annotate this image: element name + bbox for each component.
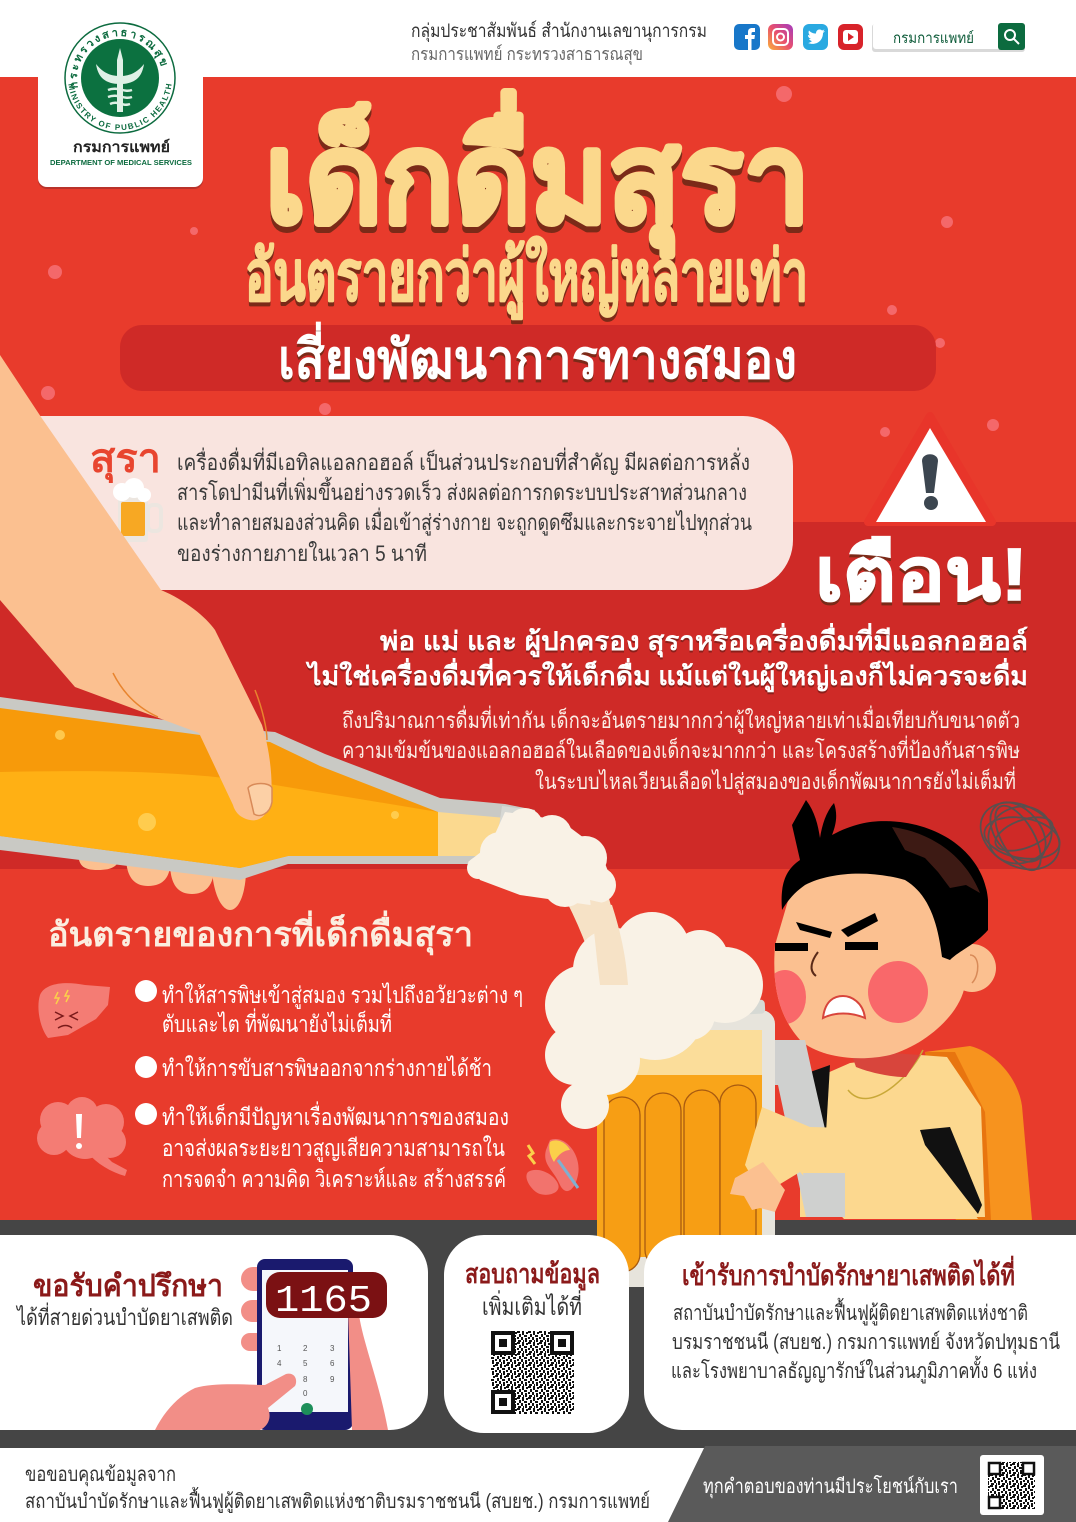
logo emblem: กระทรวงสาธารณสุข bbox=[70, 30, 167, 88]
illustration: beer bottle bbox=[0, 697, 535, 880]
icon: small beer mug bbox=[113, 478, 161, 542]
footer: feedback strip bbox=[668, 1446, 1076, 1522]
icon: phone with hands: 3 bbox=[330, 1344, 335, 1353]
icon: phone with hands: 5 bbox=[303, 1359, 308, 1368]
icon: phone with hands: 2 bbox=[303, 1344, 308, 1353]
icon: liver bbox=[38, 983, 110, 1038]
panel: inquiry QR card: สอบถามข้อมูล bbox=[465, 1259, 600, 1291]
header: department name: กรมการแพทย์ กระทรวงสาธารณสุข bbox=[411, 44, 643, 65]
logo card bbox=[38, 22, 203, 189]
icon: phone with hands: 8 bbox=[303, 1375, 308, 1384]
hotline number badge: 1165 bbox=[275, 1280, 372, 1323]
icon: youtube bbox=[838, 24, 863, 50]
footer: feedback strip: ทุกคำตอบของท่านมีประโยชน์กับเรา bbox=[703, 1475, 958, 1499]
banner: brain development risk bbox=[120, 321, 936, 391]
illustration: boy backpack bbox=[925, 1046, 1032, 1220]
subtitle: อันตรายกว่าผู้ใหญ่หลายเท่า bbox=[245, 235, 808, 320]
header: department name: กลุ่มประชาสัมพันธ์ สำนักงานเลขานุการกรม bbox=[411, 20, 707, 43]
footer: credits: ขอขอบคุณข้อมูลจาก bbox=[25, 1464, 176, 1487]
header: department name bbox=[411, 20, 707, 65]
panel: what is alcohol: ของร่างกายภายในเวลา 5 นาที bbox=[177, 541, 427, 566]
icon: dizzy scribble bbox=[969, 789, 1071, 883]
illustration: foam pouring from bottle bbox=[467, 808, 626, 985]
warning message to parents bbox=[305, 622, 1028, 693]
icon: warning triangle bbox=[868, 416, 992, 522]
illustration: fingers under bottle bbox=[78, 850, 246, 910]
list: dangers: ทำให้เด็กมีปัญหาเรื่องพัฒนาการของสมอง bbox=[162, 1101, 509, 1130]
logo emblem: MINISTRY OF PUBLIC HEALTH bbox=[68, 84, 172, 130]
icon: kidney bbox=[526, 1139, 579, 1195]
icon: brain bbox=[37, 1097, 127, 1176]
list: dangers: ทำให้การขับสารพิษออกจากร่างกายได้ช้า bbox=[162, 1055, 492, 1081]
panel: what is alcohol bbox=[0, 416, 793, 590]
icon: facebook bbox=[734, 24, 760, 50]
banner: brain development risk: เสี่ยงพัฒนาการทางสมอง bbox=[278, 321, 797, 390]
search box: กรมการแพทย์ bbox=[893, 30, 974, 47]
icon: phone with hands: 9 bbox=[330, 1375, 335, 1384]
warning explanation text bbox=[342, 705, 1020, 795]
logo card: กรมการแพทย์ bbox=[73, 138, 170, 156]
panel: what is alcohol: เครื่องดื่มที่มีเอทิลแอลกอฮอล์ เป็นส่วนประกอบที่สำคัญ มีผลต่อการหลั่ง bbox=[177, 447, 750, 475]
illustration: boy shirt bbox=[796, 1050, 985, 1217]
search box bbox=[872, 23, 1025, 52]
cheeks bbox=[764, 961, 928, 1024]
list: dangers bbox=[135, 980, 523, 1192]
icon: phone with hands bbox=[155, 1259, 388, 1430]
warning message to parents: ไม่ใช่เครื่องดื่มที่ควรให้เด็กดื่ม แม้แต่ในผู้ใหญ่เองก็ไม่ควรจะดื่ม bbox=[305, 657, 1028, 693]
logo card: DEPARTMENT OF MEDICAL SERVICES bbox=[50, 158, 192, 167]
QR code small bbox=[980, 1455, 1044, 1515]
mouth bbox=[823, 996, 865, 1018]
panel: treatment centres card bbox=[644, 1235, 1076, 1430]
hotline number badge bbox=[266, 1272, 387, 1323]
illustration: beer mug bbox=[597, 999, 845, 1287]
panel: what is alcohol: สารโดปามีนที่เพิ่มขึ้นอย่างรวดเร็ว ส่งผลต่อการกดระบบประสาทส่วนกลาง bbox=[177, 477, 747, 505]
panel: what is alcohol: สุรา bbox=[90, 437, 161, 484]
panel: what is alcohol: และทำลายสมองส่วนคิด เมื่อเข้าสู่ร่างกาย จะถูกดูดซึมและกระจายไปทุกส่วน bbox=[177, 507, 752, 536]
list: dangers: ตับและไต ที่พัฒนายังไม่เต็มที่ bbox=[162, 1008, 392, 1037]
warning message to parents: พ่อ แม่ และ ผู้ปกครอง สุราหรือเครื่องดื่มที่มีแอลกอฮอล์ bbox=[380, 622, 1028, 658]
panel: hotline card: ได้ที่สายด่วนบำบัดยาเสพติด bbox=[15, 1302, 233, 1330]
logo emblem bbox=[64, 22, 176, 134]
hair bbox=[782, 800, 988, 960]
illustration: boy sleeve and hand bbox=[730, 1107, 982, 1219]
footer: credits bbox=[0, 1448, 1076, 1522]
icon: phone with hands: 1 bbox=[277, 1344, 282, 1353]
panel: hotline card: ขอรับคำปรึกษา bbox=[33, 1270, 223, 1303]
list: dangers: อาจส่งผลระยะยาวสูญเสียความสามารถใน bbox=[162, 1135, 505, 1162]
icon: twitter bbox=[803, 24, 828, 50]
illustration: mug foam bbox=[545, 900, 763, 1129]
panel: inquiry QR card: เพิ่มเติมได้ที่ bbox=[482, 1290, 582, 1321]
section heading: dangers: อันตรายของการที่เด็กดื่มสุรา bbox=[48, 910, 473, 956]
list: dangers: ทำให้สารพิษเข้าสู่สมอง รวมไปถึงอวัยวะต่าง ๆ bbox=[162, 982, 523, 1009]
icon: phone with hands: 6 bbox=[330, 1359, 335, 1368]
list: dangers: การจดจำ ความคิด วิเคราะห์และ สร้างสรรค์ bbox=[162, 1166, 506, 1192]
warning heading: เตือน! bbox=[815, 533, 1028, 616]
illustration: arm and hand holding bottle bbox=[0, 355, 272, 820]
title: เด็กดื่มสุรา bbox=[265, 90, 810, 257]
eyes and brows bbox=[775, 943, 808, 951]
panel: hotline card bbox=[0, 1235, 428, 1430]
footer: credits: สถาบันบำบัดรักษาและฟื้นฟูผู้ติดยาเสพติดแห่งชาติบรมราชชนนี (สบยช.) กรมการแพทย์ bbox=[25, 1487, 650, 1514]
icon: instagram bbox=[768, 24, 793, 50]
QR code bbox=[491, 1331, 574, 1414]
illustration: boy head bbox=[764, 800, 996, 1058]
icon: phone with hands: 4 bbox=[277, 1359, 282, 1368]
panel: inquiry QR card bbox=[444, 1235, 629, 1433]
icon: phone with hands: 0 bbox=[303, 1389, 308, 1398]
